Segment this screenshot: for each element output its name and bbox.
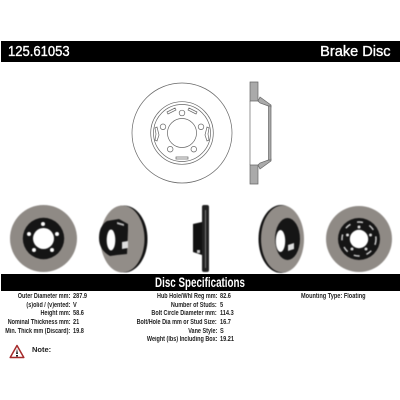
specs column 2: Hub Hole/Whl Reg mm:: [157, 292, 217, 300]
specs column 1: V: [73, 302, 77, 308]
specs column 2: 82.6: [220, 292, 230, 300]
icon: warning triangle: [9, 344, 25, 358]
specs column 2: [137, 292, 234, 343]
specs column 2: S: [220, 328, 223, 334]
product type: Brake Disc: [321, 43, 391, 60]
note label: Note:: [32, 345, 51, 354]
photo: disc edge view: [193, 205, 209, 272]
specs column 1: 287.9: [73, 292, 87, 300]
specs column 1: [6, 292, 87, 334]
specs column 1: Height mm:: [40, 310, 70, 317]
specs column 1: 58.6: [73, 310, 84, 317]
specs column 1: Min. Thick mm (Discard):: [6, 328, 70, 334]
specs column 3: mounting type: Mounting Type: Floating: [301, 292, 366, 300]
specs column 2: Number of Studs:: [171, 302, 217, 308]
photo: disc back: [326, 206, 392, 272]
specs column 1: 21: [73, 318, 79, 326]
specifications heading: Disc Specifications: [155, 274, 245, 290]
specifications bar: [1, 274, 400, 291]
specs column 2: 16.7: [220, 318, 230, 326]
specs column 2: 5: [220, 302, 223, 308]
specs column 2: Weight (lbs) Including Box:: [146, 336, 217, 343]
specs column 2: Vane Style:: [188, 328, 217, 334]
specs column 1: Outer Diameter mm:: [18, 292, 70, 300]
specs column 2: Bolt Circle Diameter mm:: [152, 310, 217, 317]
technical drawing: front view and cross-section: [132, 82, 272, 184]
product photos of disc: [9, 204, 393, 274]
specs column 1: (s)olid / (v)ented:: [27, 302, 70, 308]
photo: disc front: [10, 205, 77, 272]
specs column 1: Nominal Thickness mm:: [8, 318, 70, 326]
cross-section view of disc: [250, 82, 271, 184]
photo: disc angled left: [99, 206, 148, 272]
photo: disc angled right: [258, 205, 304, 273]
part number: 125.61053: [8, 43, 70, 60]
specs column 2: 19.21: [220, 336, 234, 343]
specs column 2: 114.3: [220, 310, 233, 317]
specs column 1: 19.8: [73, 328, 84, 334]
specs column 2: Bolt/Hole Dia mm or Stud Size:: [137, 318, 217, 326]
header bar: [1, 41, 400, 62]
front view of disc: [132, 83, 232, 183]
